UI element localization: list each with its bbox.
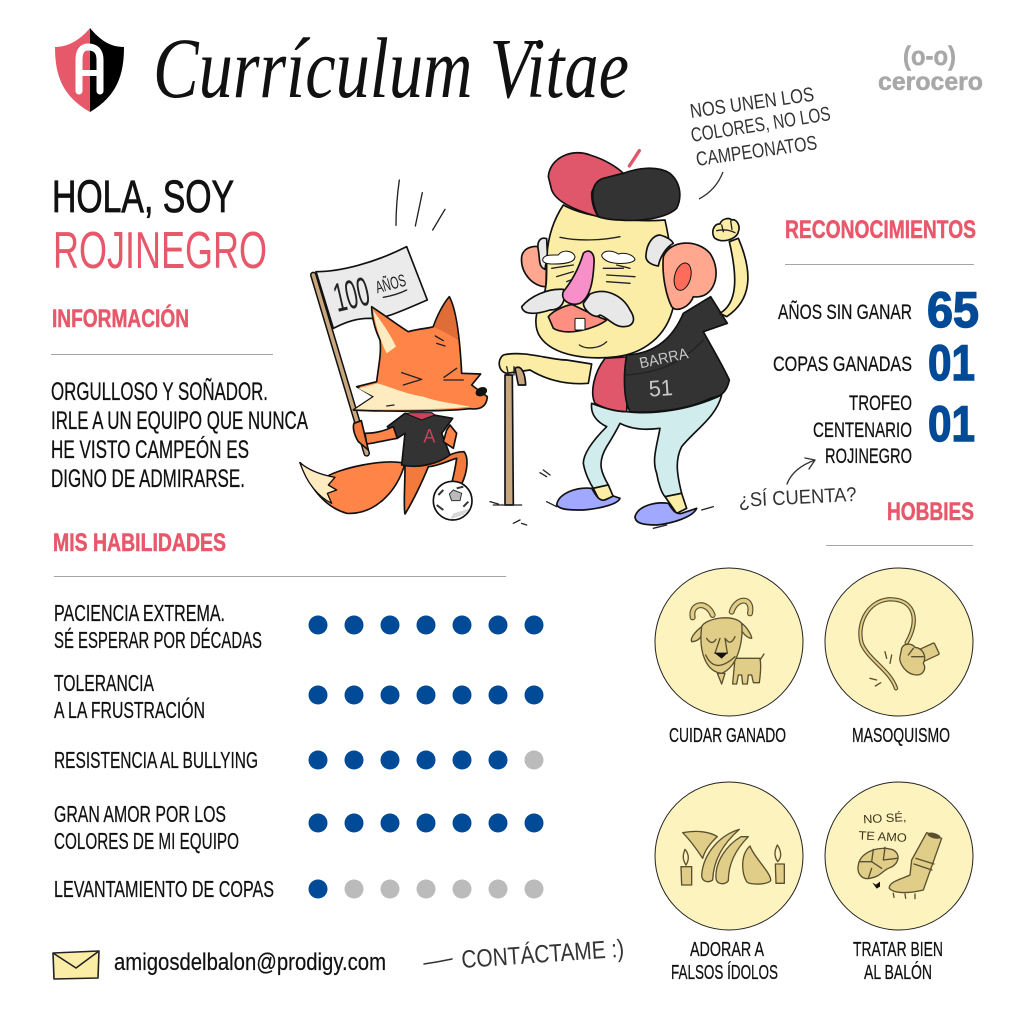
icon: ball and boot: NO SÉ, <box>863 809 907 826</box>
illustration: fox and old fan <box>300 151 748 528</box>
fan legs: jeans <box>583 395 722 497</box>
fox tail <box>300 462 405 513</box>
flag: AÑOS <box>373 270 408 297</box>
icon: ball and boot <box>858 809 942 899</box>
skill: tolerancia: A LA FRUSTRACIÓN <box>54 697 205 723</box>
stat: trofeo centenario <box>813 392 975 468</box>
hobby: tratar bien al balón <box>825 782 973 984</box>
skill: tolerancia <box>54 670 544 723</box>
skill: paciencia: SÉ ESPERAR POR DÉCADAS <box>54 627 262 653</box>
heading: rojinegro: ROJINEGRO <box>53 222 267 280</box>
stat: años sin ganar: 65 <box>927 282 979 338</box>
contact note <box>424 934 625 974</box>
text block: información: ORGULLOSO Y SOÑADOR. <box>51 377 268 406</box>
logo: cerocero: cerocero <box>878 68 983 96</box>
label: TRATAR BIEN <box>853 939 943 961</box>
title: Currículum Vitae <box>153 20 629 116</box>
speech bubble: old fan: CAMPEONATOS <box>695 132 819 171</box>
fox legs <box>404 452 467 514</box>
fan beret <box>548 151 680 220</box>
label: FALSOS ÍDOLOS <box>671 961 778 984</box>
stat: copas ganadas <box>773 335 975 391</box>
fan feet <box>547 485 713 528</box>
fan raised arm <box>713 219 748 317</box>
speech bubble: old fan: NOS UNEN LOS <box>689 84 815 123</box>
illustration: fox and old fan: A <box>423 427 435 448</box>
icon: club shield <box>55 28 124 112</box>
stat: trofeo centenario: TROFEO <box>849 392 912 415</box>
hobby: cuidar ganado <box>655 568 803 747</box>
arrow note: si cuenta: ¿SÍ CUENTA? <box>738 483 857 512</box>
skill: gran amor: GRAN AMOR POR LOS <box>54 801 226 827</box>
football <box>433 481 472 520</box>
fan mouth <box>548 305 607 348</box>
text block: información: HE VISTO CAMPEÓN ES <box>51 435 249 464</box>
fan nose <box>563 251 594 304</box>
fan body: shirt <box>593 297 729 412</box>
skills list <box>54 600 544 902</box>
skill: gran amor <box>54 801 544 854</box>
label <box>671 939 778 984</box>
fan left ear <box>522 247 547 287</box>
skill: resistencia: RESISTENCIA AL BULLYING <box>54 747 258 773</box>
skill: gran amor: COLORES DE MI EQUIPO <box>54 828 239 854</box>
text block: información: DIGNO DE ADMIRARSE. <box>51 465 245 493</box>
stat: trofeo centenario: ROJINEGRO <box>825 445 912 468</box>
fan body: shirt: BARRA <box>638 345 690 372</box>
flag <box>313 247 427 453</box>
stat: copas ganadas: 01 <box>928 335 975 391</box>
speech bubble: old fan <box>689 84 832 199</box>
icon: goat <box>691 601 764 684</box>
speech bubble: old fan: COLORES, NO LOS <box>689 103 832 147</box>
skill: levantamiento <box>54 876 544 902</box>
skill: levantamiento: LEVANTAMIENTO DE COPAS <box>54 876 274 902</box>
stat: trofeo centenario: CENTENARIO <box>813 419 912 442</box>
heading: hola soy: HOLA, SOY <box>52 171 234 222</box>
icon: envelope <box>53 951 99 979</box>
stat: copas ganadas: COPAS GANADAS <box>773 353 912 376</box>
fan eyes <box>543 237 635 283</box>
stat: años sin ganar <box>778 282 979 338</box>
text block: información: IRLE A UN EQUIPO QUE NUNCA <box>51 407 308 435</box>
fox head <box>353 297 489 411</box>
label <box>853 939 943 984</box>
label: CUIDAR GANADO <box>669 725 786 747</box>
text block: información <box>51 377 308 493</box>
fan moustache <box>522 289 633 327</box>
cane <box>490 375 550 525</box>
contact email: amigosdelbalon@prodigy.com <box>114 949 386 976</box>
skill: tolerancia: TOLERANCIA <box>54 670 154 696</box>
label: ADORAR A <box>690 939 764 961</box>
fox arms <box>365 427 397 444</box>
stat: años sin ganar: AÑOS SIN GANAR <box>778 300 912 324</box>
fan head <box>536 205 673 358</box>
logo: cerocero: (o-o) <box>903 41 956 71</box>
icon: whip <box>860 599 939 688</box>
heading: mis habilidades: MIS HABILIDADES <box>53 529 226 557</box>
label: AL BALÓN <box>864 961 932 984</box>
skill: paciencia <box>54 600 544 653</box>
icon: ball and boot: TE AMO <box>858 828 907 845</box>
fan body: shirt: 51 <box>648 374 674 402</box>
skill: resistencia <box>54 747 544 773</box>
icon: altar <box>681 829 784 885</box>
stat: trofeo centenario: 01 <box>928 396 975 452</box>
fox shirt <box>387 413 453 466</box>
arrow note: si cuenta <box>738 458 857 512</box>
heading: hobbies: HOBBIES <box>887 498 974 526</box>
fan right ear <box>663 243 716 309</box>
flag: 100 <box>329 268 374 321</box>
hobby: adorar a falsos ídolos <box>655 782 803 984</box>
contact note: CONTÁCTAME :) <box>460 934 625 974</box>
skill: paciencia: PACIENCIA EXTREMA. <box>54 600 225 626</box>
fan hair <box>538 235 673 269</box>
motion lines <box>396 180 445 230</box>
heading: información: INFORMACIÓN <box>52 303 189 333</box>
label: MASOQUISMO <box>852 725 950 747</box>
hobby: masoquismo <box>825 568 973 747</box>
fan arm on cane <box>499 354 592 385</box>
logo: cerocero <box>878 41 983 96</box>
